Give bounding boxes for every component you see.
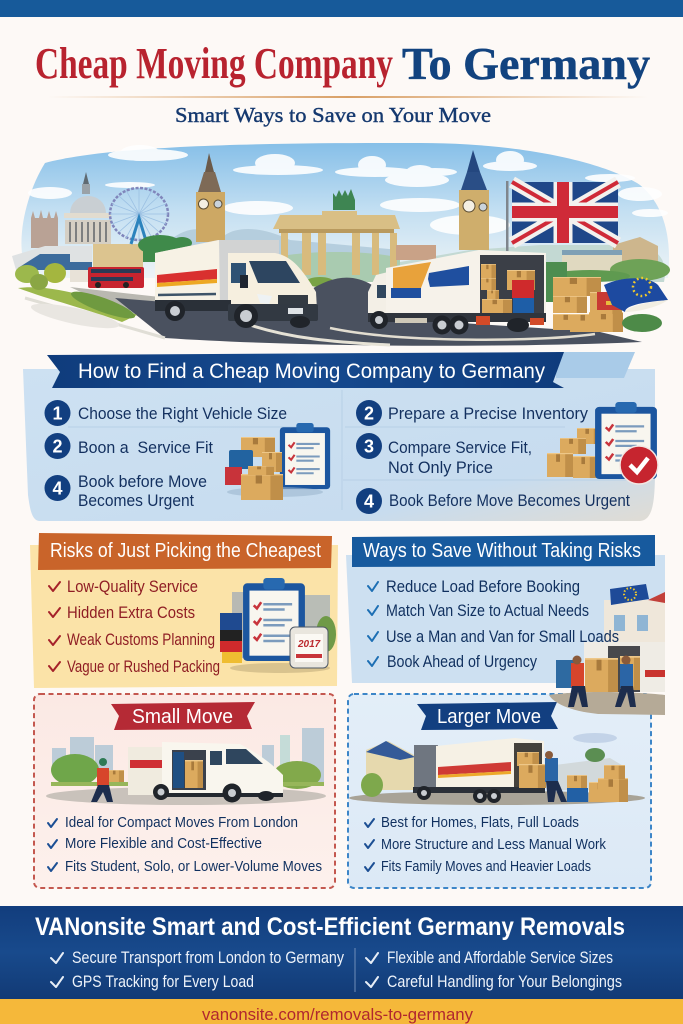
banner heading [38,533,332,570]
footer benefits: Flexible and Affordable Service Sizes [387,948,613,967]
icon: boxes and clipboard right [547,402,658,484]
panel: ways to save [346,535,665,715]
step 4 right: 4 [364,492,374,512]
ribbon heading: Small Move [132,706,233,728]
title: Cheap Moving Company [35,39,393,88]
step 1 left: Choose the Right Vehicle Size [78,404,287,423]
small move list: More Flexible and Cost-Effective [65,835,262,852]
landmark: cathedral [31,210,58,248]
step 3 right: 3 [364,436,374,456]
step 4 left: Becomes Urgent [78,491,194,510]
larger move list [365,814,606,875]
small move list: Fits Student, Solo, or Lower-Volume Moves [65,858,322,875]
savings list: Book Ahead of Urgency [387,652,537,671]
step 2 left [44,433,213,459]
step 1 left: 1 [52,404,63,424]
larger move list: Fits Family Moves and Heavier Loads [381,858,591,875]
distant hills [170,229,400,278]
small move list [48,814,322,875]
landmark: Brandenburg Gate [273,189,400,287]
banner heading: Ways to Save Without Taking Risks [363,539,641,562]
icon: boxes and clipboard left [225,423,330,500]
hero illustration [12,143,670,346]
step 4 right: Book Before Move Becomes Urgent [389,491,630,510]
step 2 right: Prepare a Precise Inventory [388,404,588,423]
flag: United Kingdom [506,181,618,251]
clouds [28,145,668,235]
banner heading: How to Find a Cheap Moving Company to Germany [78,360,545,383]
step 2 left: 2 [52,436,63,456]
step 4 right [356,488,630,514]
savings list [368,577,619,671]
background buildings right [396,237,670,302]
trees [138,235,192,262]
larger move list: More Structure and Less Manual Work [381,836,606,853]
panel: larger move [348,694,651,888]
step 4 left: 4 [52,478,63,498]
top bar [0,0,683,17]
footer benefits: Secure Transport from London to Germany [72,948,344,967]
website bar: vanonsite.com/removals-to-germany [202,1005,473,1024]
banner heading: Risks of Just Picking the Cheapest [50,539,321,562]
illustration: house, van and movers [549,584,665,715]
landmark: clock tower left [196,153,225,242]
risk list: Weak Customs Planning [67,630,215,649]
title: To Germany [402,39,650,89]
step 2 right [356,400,588,426]
larger move list: Best for Homes, Flats, Full Loads [381,814,579,831]
ribbon heading [417,702,558,730]
step 2 right: 2 [364,404,374,424]
step 1 left [44,400,287,426]
stacked cardboard boxes [553,277,623,332]
step 3 right [356,433,532,477]
ribbon heading [111,702,255,730]
footer benefits: GPS Tracking for Every Load [72,972,254,991]
landmark: clock tower right [459,150,489,250]
double-decker bus [70,267,144,288]
landmark: ferris wheel [110,188,168,244]
website bar [0,999,683,1024]
panel: risks of picking the cheapest [30,533,338,688]
icon: clipboard, flag, calendar [220,578,336,673]
risk list: Vague or Rushed Packing [67,657,220,676]
step 4 left [44,472,207,510]
illustration: van and skyline [46,728,326,805]
EU flag [604,278,668,332]
step 4 left: Book before Move [78,472,207,491]
panel: how to find a cheap moving company [23,352,658,521]
banner heading [352,535,655,567]
step 3 right: Not Only Price [388,458,493,477]
risk list [49,577,220,676]
banner heading [47,352,564,388]
landmark: domed building [12,172,143,270]
step 3 right: Compare Service Fit, [388,438,532,457]
white moving truck [155,240,318,328]
shrubs [15,263,137,323]
icon: clipboard, flag, calendar: 2017 [297,639,321,650]
footer benefits: Careful Handling for Your Belongings [387,972,622,991]
savings list: Use a Man and Van for Small Loads [386,627,619,646]
savings list: Reduce Load Before Booking [386,577,580,596]
risk list: Hidden Extra Costs [67,603,195,622]
footer band [0,906,683,999]
footer heading: VANonsite Smart and Cost-Efficient Germany Removals [35,913,625,941]
ground and road [70,287,215,310]
open box truck [368,250,546,334]
panel: small move [34,694,335,888]
step 2 left: Boon a Service Fit [78,438,213,457]
illustration: truck and house [349,733,645,805]
small move list: Ideal for Compact Moves From London [65,814,298,831]
footer benefits [51,948,622,991]
savings list: Match Van Size to Actual Needs [386,601,589,620]
subtitle: Smart Ways to Save on Your Move [175,103,491,127]
sky [21,143,669,278]
risk list: Low-Quality Service [67,577,198,596]
ribbon heading: Larger Move [437,706,541,728]
